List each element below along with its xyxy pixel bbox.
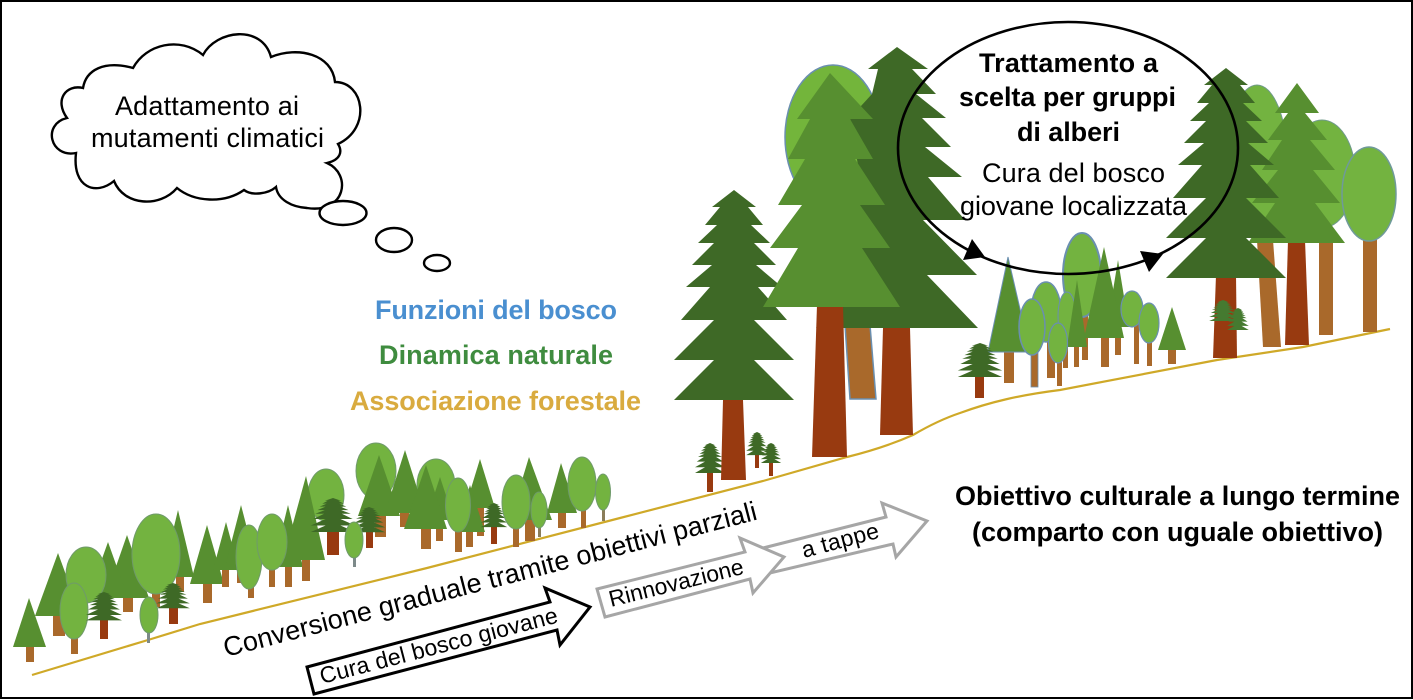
young tree group inside the cycle <box>958 233 1186 398</box>
coloured criteria labels <box>350 295 641 416</box>
seedlings at the foot of the tall spruce <box>695 432 781 492</box>
front row trees <box>13 457 610 662</box>
arrowhead right <box>1140 251 1163 272</box>
heading: treatment: scelta per gruppi <box>959 82 1176 112</box>
cloud outline <box>52 34 360 209</box>
tree: left tall spruce <box>674 190 794 480</box>
slope caption: Conversione graduale tramite obiettivi parziali <box>220 496 760 663</box>
young forest on the left slope <box>13 443 610 662</box>
label: natural dynamics: Dinamica naturale <box>379 340 613 370</box>
arrow: stages <box>763 503 927 573</box>
arrow: young forest care: Cura del bosco giovane <box>317 602 560 689</box>
cycle ellipse with arrows <box>898 22 1238 274</box>
arrow: regeneration: Rinnovazione <box>606 553 746 612</box>
note: young forest care: giovane localizzata <box>960 191 1188 221</box>
mature tree group on the right <box>1166 68 1396 358</box>
label: forest functions: Funzioni del bosco <box>375 295 617 325</box>
arrow: regeneration <box>597 538 784 617</box>
arrowhead left <box>963 239 985 260</box>
long-term goal text: (comparto con uguale obiettivo) <box>972 517 1383 547</box>
long-term goal text: Obiettivo culturale a lungo termine <box>955 481 1400 511</box>
tree: small spruce <box>958 343 1002 398</box>
arrow: stages: a tappe <box>799 517 882 563</box>
back row trees <box>35 443 577 636</box>
mature tree group in the centre <box>763 47 978 457</box>
thought bubble <box>52 34 450 271</box>
cloud text: mutamenti climatici <box>91 123 324 153</box>
tree: broadleaf behind <box>785 65 881 399</box>
cloud text: Adattamento ai <box>115 91 299 121</box>
tree: mid-green fir <box>763 73 900 457</box>
label: forest association: Associazione forestale <box>350 386 641 416</box>
note: young forest care: Cura del bosco <box>982 158 1165 188</box>
heading: treatment: Trattamento a <box>979 48 1159 78</box>
cloud bubbles <box>320 201 450 271</box>
ground line: slope <box>32 329 1390 675</box>
heading: treatment: di alberi <box>1017 117 1120 147</box>
tree: dark spruce <box>816 47 978 435</box>
cycle text <box>959 48 1188 221</box>
